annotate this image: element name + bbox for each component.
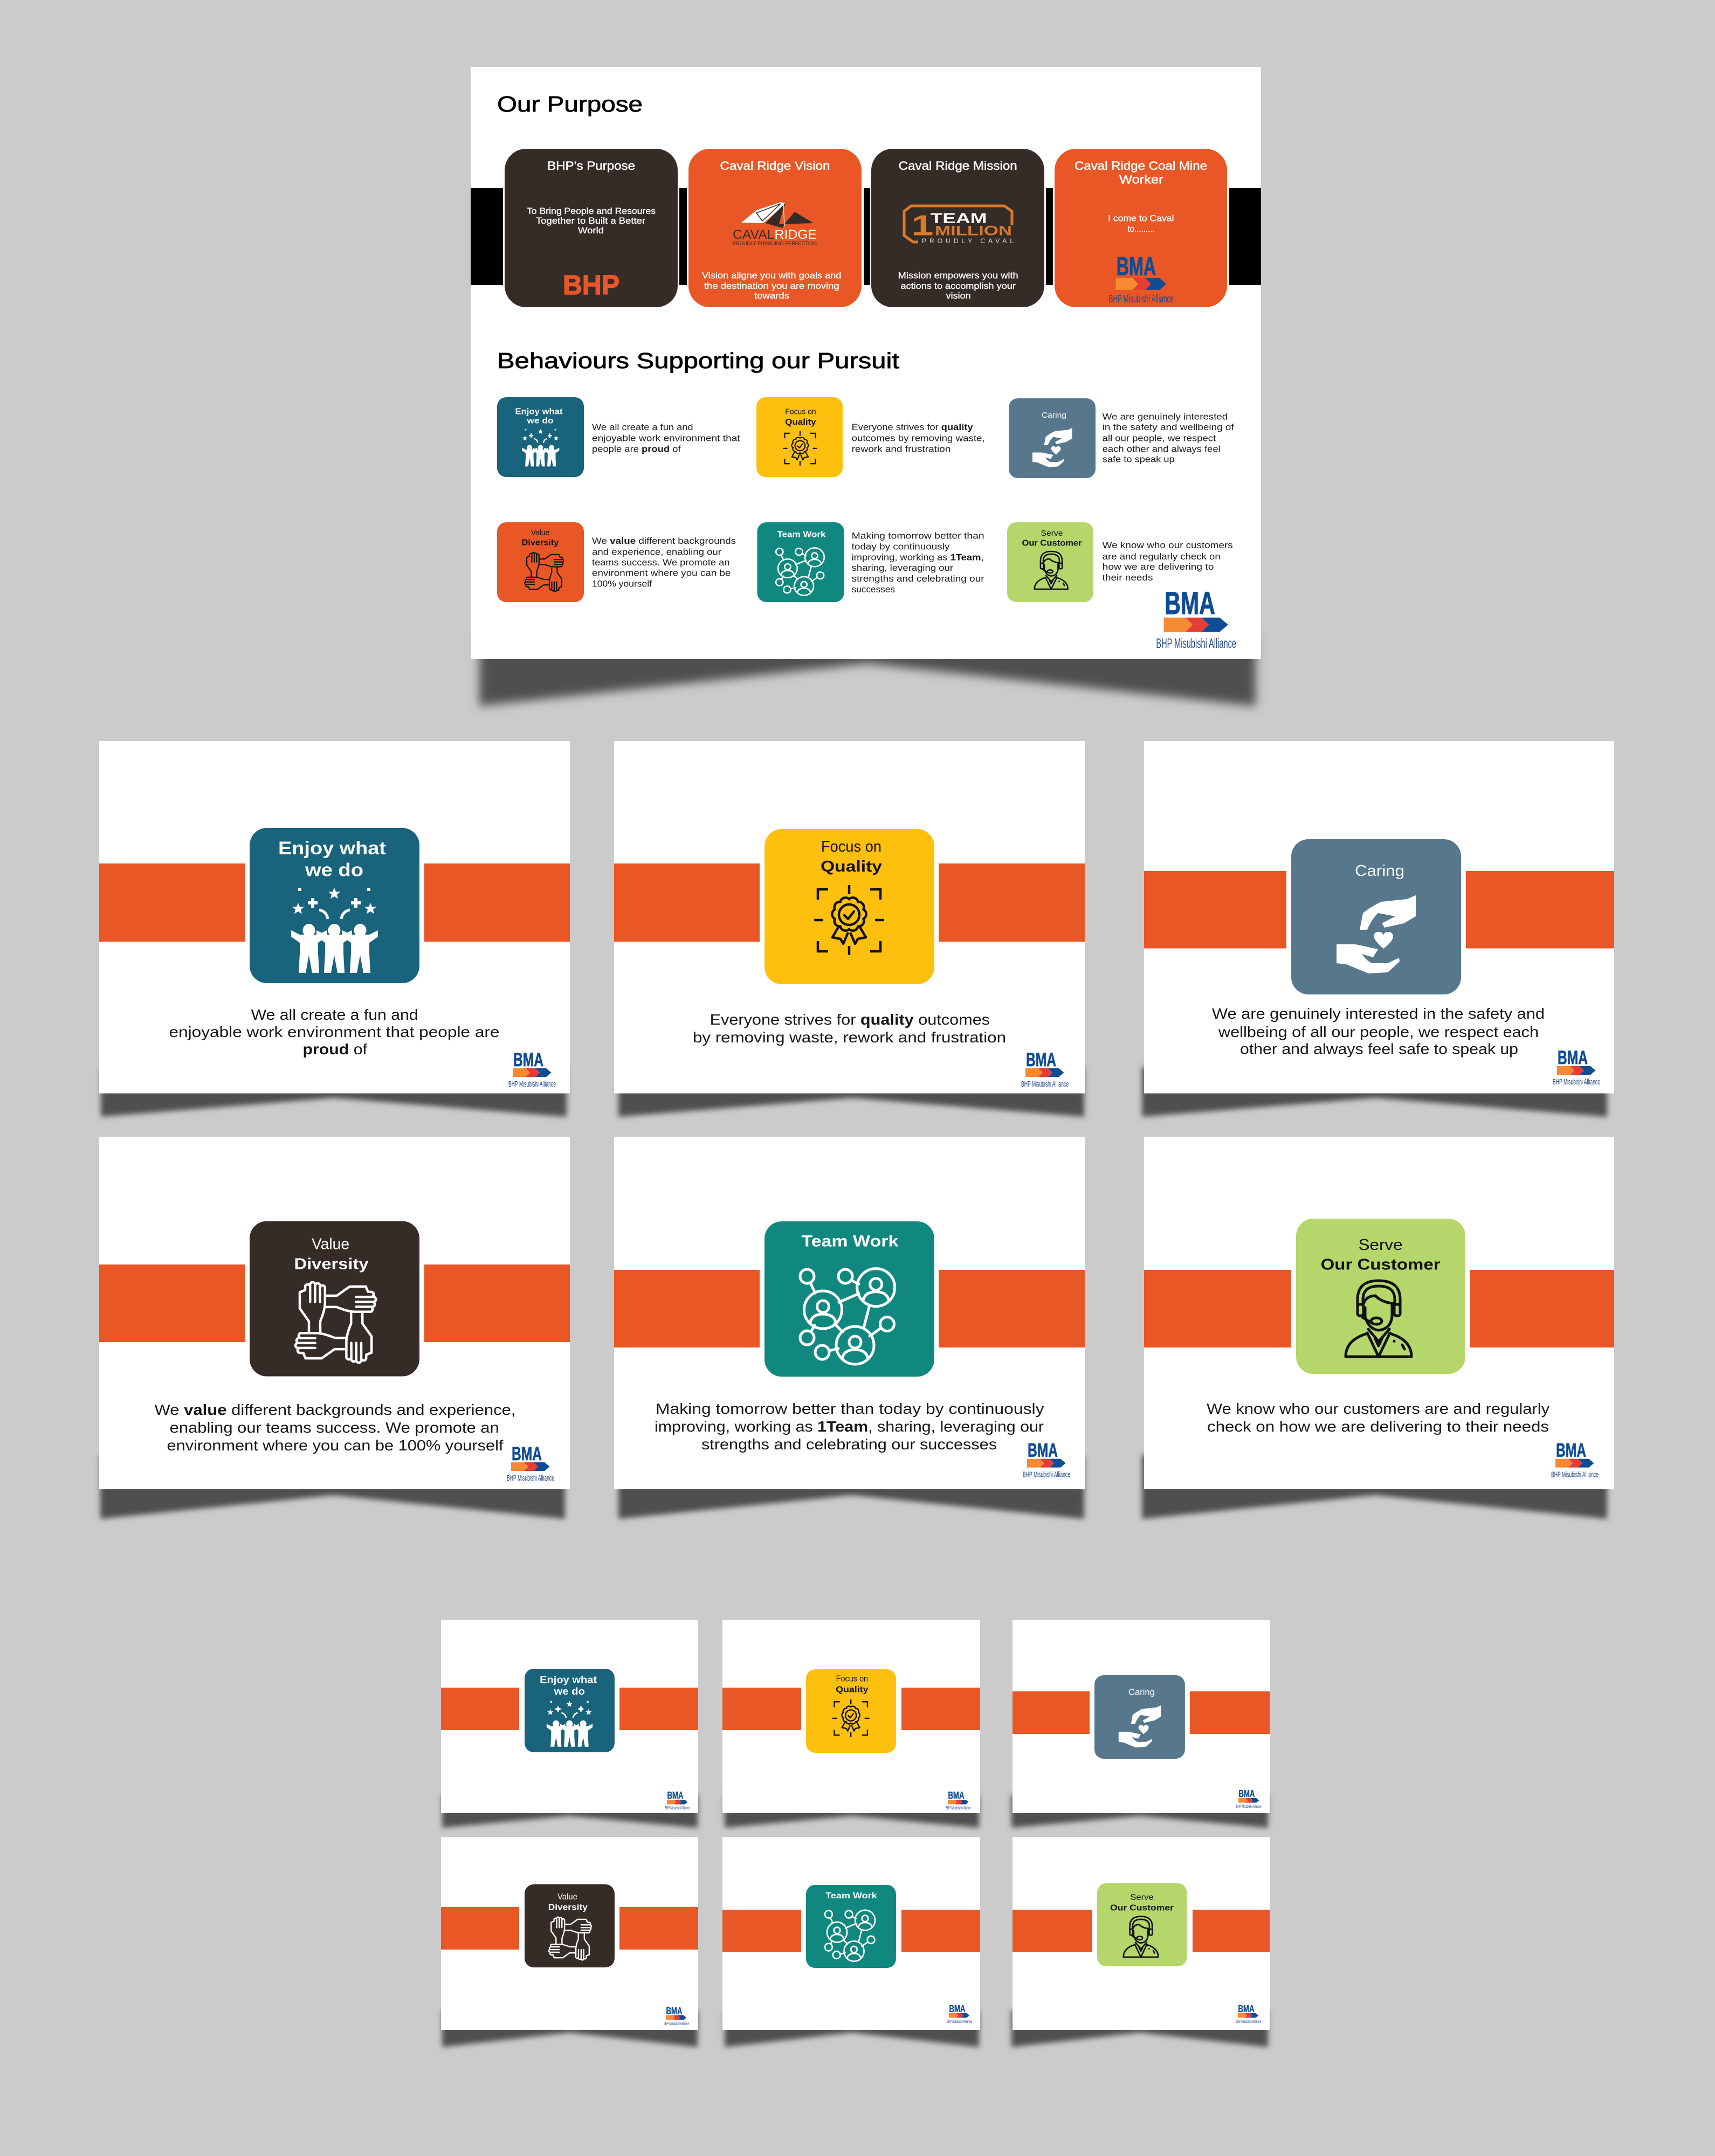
icon card: Quality <box>821 858 882 875</box>
logo: BMA: BHP Misubishi Alliance <box>1236 1804 1262 1809</box>
behaviour: enjoy what we do: we do <box>526 417 554 426</box>
description: We know who our customers are and regularly <box>1207 1400 1549 1417</box>
icon card: Enjoy what <box>278 838 386 859</box>
description: all our people, we respect <box>1103 433 1216 443</box>
description: are and regularly check on <box>1103 551 1221 562</box>
description: Making tomorrow better than today by continuously <box>656 1400 1044 1417</box>
logo: BMA: BMA <box>1556 1440 1586 1461</box>
logo: BMA <box>1021 1049 1069 1089</box>
small slide: customer <box>1011 1837 1270 2047</box>
icon card <box>1296 1219 1465 1374</box>
description: outcomes by removing waste, <box>852 433 985 443</box>
behaviour: serve our customer: Serve <box>1041 529 1063 538</box>
logo: BMA: BMA <box>513 1049 543 1070</box>
logo: BMA: BHP Misubishi Alliance <box>1156 636 1236 651</box>
icon card: Caring <box>1128 1688 1155 1697</box>
description: improving, working as 1Team , sharing, leveraging our <box>655 1418 1044 1435</box>
logo: 1 team 1 million: MILLION <box>935 224 1012 239</box>
slide: focus on quality <box>614 741 1085 1117</box>
card: caval ridge mission: Caval Ridge Mission <box>899 159 1017 172</box>
card: caval ridge mission: actions to accomplish your <box>900 281 1016 291</box>
logo: BMA <box>664 2005 689 2026</box>
logo: BMA: BHP Misubishi Alliance <box>1023 1470 1070 1480</box>
logo: BMA: BMA <box>1165 586 1215 621</box>
icon card <box>1094 1675 1185 1759</box>
description: We value different backgrounds and experience, <box>154 1401 515 1418</box>
icon card: Caring <box>1355 862 1404 880</box>
description: strengths and celebrating our successes <box>701 1436 997 1453</box>
small slide: enjoy <box>441 1620 698 1828</box>
behaviour: team work <box>757 522 984 602</box>
panel: our purpose poster <box>471 67 1261 706</box>
icon card: Serve <box>1130 1893 1154 1902</box>
small slide: team work <box>722 1837 980 2047</box>
icon card: Value <box>312 1235 349 1253</box>
heading: our purpose: Our Purpose <box>497 92 643 116</box>
behaviour: enjoy what we do: Enjoy what <box>515 407 563 417</box>
logo: BMA: BMA <box>1238 2003 1255 2014</box>
icon card: Diversity <box>294 1256 369 1273</box>
description: 100% yourself <box>592 578 652 589</box>
logo: BMA <box>1023 1440 1070 1480</box>
logo: caval ridge: CAVALRIDGE <box>733 227 817 242</box>
card: caval ridge vision: the destination you are moving <box>704 281 839 291</box>
logo: BMA: BHP Misubishi Alliance <box>1108 293 1174 305</box>
logo: BMA <box>508 1049 556 1089</box>
icon card: Focus on <box>821 838 881 855</box>
description: We all create a fun and <box>251 1006 418 1023</box>
behaviour: value diversity <box>497 522 736 602</box>
description: in the safety and wellbeing of <box>1103 422 1234 432</box>
logo: BMA <box>1236 2003 1261 2024</box>
description: improving, working as 1Team , <box>852 552 984 563</box>
logo: BMA: BMA <box>1026 1049 1056 1070</box>
description: sharing, leveraging our <box>852 563 953 573</box>
description: Everyone strives for quality outcomes <box>710 1011 990 1028</box>
logo: BMA: BMA <box>667 1789 684 1801</box>
card: caval ridge vision <box>688 149 862 307</box>
card: caval ridge vision: Caval Ridge Vision <box>720 159 830 172</box>
description: other and always feel safe to speak up <box>1240 1040 1518 1058</box>
description: rework and frustration <box>852 444 951 454</box>
icon card: Our Customer <box>1321 1256 1441 1273</box>
logo: BMA: BMA <box>1117 252 1156 281</box>
description: their needs <box>1103 572 1153 583</box>
logo: BMA: BHP Misubishi Alliance <box>664 2021 689 2026</box>
icon card <box>1097 1883 1187 1966</box>
logo: BMA: BHP Misubishi Alliance <box>1551 1470 1599 1480</box>
description <box>592 536 736 589</box>
logo: 1 team 1 million: TEAM <box>931 210 987 226</box>
card: BHP's purpose: World <box>578 225 604 236</box>
description: how we are delivering to <box>1103 562 1214 572</box>
description: and experience, enabling our <box>592 547 721 557</box>
description <box>852 422 985 454</box>
description: people are proud of <box>592 444 681 454</box>
logo: BMA: BMA <box>512 1443 542 1464</box>
logo: BMA: BMA <box>949 2003 966 2014</box>
card: coal mine worker: to......... <box>1128 224 1155 234</box>
icon card: Focus on <box>836 1674 868 1684</box>
icon card <box>806 1885 896 1968</box>
logo: BMA <box>947 2003 972 2024</box>
description: We all create a fun and <box>592 422 693 432</box>
icon card <box>525 1669 615 1752</box>
behaviour: serve our customer: Our Customer <box>1022 539 1082 548</box>
description: We are genuinely interested <box>1103 411 1228 421</box>
slide: team work <box>614 1137 1085 1519</box>
logo: BMA <box>1156 586 1236 651</box>
icon card: Quality <box>836 1685 869 1695</box>
logo: BMA <box>1108 252 1174 305</box>
description <box>169 1006 499 1058</box>
card: coal mine worker: Caval Ridge Coal Mine <box>1075 159 1207 172</box>
behaviour: value diversity: Value <box>531 528 549 537</box>
logo: BMA <box>1551 1440 1599 1480</box>
icon card <box>525 1884 615 1967</box>
card: caval ridge mission: vision <box>946 291 971 301</box>
description: each other and always feel <box>1103 444 1221 454</box>
logo: BMA: BHP Misubishi Alliance <box>946 1806 971 1811</box>
icon card: we do <box>553 1686 585 1697</box>
logo: 1 team 1 million <box>904 206 1014 245</box>
card: BHP's purpose: BHP <box>563 270 619 300</box>
description <box>1103 411 1234 464</box>
logo: caval ridge <box>733 202 817 247</box>
card: caval ridge mission <box>871 149 1044 307</box>
description: enjoyable work environment that <box>592 433 740 443</box>
behaviour: team work: Team Work <box>777 530 826 539</box>
card: BHP's purpose: Together to Built a Better <box>536 216 645 226</box>
description: by removing waste, rework and frustration <box>693 1029 1006 1046</box>
small slide: diversity <box>441 1837 698 2047</box>
description: enabling our teams success. We promote an <box>170 1419 499 1436</box>
description <box>154 1401 515 1454</box>
description <box>655 1400 1044 1453</box>
icon card: we do <box>305 860 363 881</box>
behaviour: serve our customer <box>1007 522 1233 602</box>
card: coal mine worker <box>1055 149 1227 307</box>
logo: BMA: BHP Misubishi Alliance <box>1021 1080 1069 1089</box>
small slide: caring <box>1011 1620 1270 1828</box>
behaviour: caring <box>1009 398 1234 478</box>
logo: BMA: BHP Misubishi Alliance <box>665 1806 690 1811</box>
description: We know who our customers <box>1103 540 1233 550</box>
behaviour: focus on quality <box>756 397 985 477</box>
icon card: Our Customer <box>1110 1903 1174 1913</box>
card: BHP's purpose: To Bring People and Resoures <box>527 206 656 216</box>
logo: BMA: BHP Misubishi Alliance <box>507 1474 554 1483</box>
card: caval ridge vision: towards <box>754 291 789 301</box>
icon card <box>250 828 419 983</box>
card: caval ridge mission: Mission empowers you with <box>898 271 1018 281</box>
logo: BMA: BMA <box>948 1789 965 1801</box>
icon card <box>764 1221 934 1377</box>
icon card: Team Work <box>801 1232 899 1250</box>
behaviour: value diversity: Diversity <box>522 538 559 548</box>
description: Everyone strives for quality <box>852 422 973 432</box>
card: BHP's purpose: BHP’s Purpose <box>547 159 635 172</box>
description <box>1103 540 1233 583</box>
icon card <box>250 1221 419 1377</box>
logo: 1 team 1 million: PROUDLY CAVAL <box>922 237 1014 245</box>
logo: BMA: BMA <box>666 2005 683 2016</box>
logo: BMA <box>1236 1788 1262 1809</box>
description: wellbeing of all our people, we respect each <box>1218 1024 1539 1040</box>
card: coal mine worker: Worker <box>1119 173 1163 186</box>
description: enjoyable work environment that people are <box>169 1024 499 1040</box>
description <box>852 531 984 595</box>
behaviour: focus on quality: Quality <box>785 418 816 427</box>
icon card: Diversity <box>548 1903 588 1912</box>
heading: behaviours: Behaviours Supporting our Pursuit <box>497 348 900 373</box>
logo: BMA: BMA <box>1558 1047 1588 1068</box>
logo: BMA <box>946 1789 971 1811</box>
description: proud of <box>303 1041 367 1058</box>
icon card <box>806 1669 896 1753</box>
logo: BMA: BHP Misubishi Alliance <box>508 1080 556 1089</box>
description: today by continuously <box>852 541 950 551</box>
card: coal mine worker: I come to Caval <box>1108 213 1174 224</box>
logo: BMA <box>665 1789 690 1811</box>
slide: value diversity <box>99 1137 570 1519</box>
description: check on how we are delivering to their needs <box>1207 1418 1549 1435</box>
icon card: Serve <box>1359 1236 1403 1254</box>
description: We value different backgrounds <box>592 536 736 546</box>
slide: enjoy what we do <box>99 741 570 1117</box>
logo: BMA: BMA <box>1239 1788 1255 1799</box>
logo: BMA: BHP Misubishi Alliance <box>1236 2019 1261 2024</box>
description: successes <box>852 584 895 595</box>
description: We are genuinely interested in the safety and <box>1212 1005 1545 1022</box>
behaviour: focus on quality: Focus on <box>785 407 816 417</box>
logo: BMA <box>1553 1047 1600 1087</box>
small slide: quality <box>722 1620 980 1828</box>
slide: caring <box>1142 741 1614 1117</box>
description: environment where you can be <box>592 568 731 578</box>
description: safe to speak up <box>1103 454 1175 464</box>
behaviour: caring: Caring <box>1042 411 1066 420</box>
behaviour: enjoy what we do <box>497 397 740 477</box>
slide: serve our customer <box>1142 1137 1614 1519</box>
logo: caval ridge: PROUDLY PURSUING PERFECTION <box>733 241 817 247</box>
icon card <box>764 829 934 984</box>
logo: BMA <box>507 1443 554 1483</box>
description: Making tomorrow better than <box>852 531 984 541</box>
description: environment where you can be 100% yourself <box>167 1437 504 1454</box>
description <box>693 1011 1006 1046</box>
description: teams success. We promote an <box>592 557 730 568</box>
icon card: Enjoy what <box>540 1674 597 1685</box>
card: BHP's purpose <box>505 149 678 307</box>
description <box>592 422 740 454</box>
logo: 1 team 1 million: 1 <box>911 210 934 242</box>
icon card: Team Work <box>825 1891 877 1901</box>
logo: BMA: BMA <box>1028 1440 1058 1461</box>
logo: BMA: BHP Misubishi Alliance <box>947 2019 972 2024</box>
description <box>1207 1400 1549 1435</box>
logo: BMA: BHP Misubishi Alliance <box>1553 1077 1600 1087</box>
card: caval ridge vision: Vision aligne you with goals and <box>702 271 841 281</box>
icon card: Value <box>557 1892 577 1902</box>
icon card <box>1291 839 1461 994</box>
black band <box>471 188 1261 285</box>
description: strengths and celebrating our <box>852 573 984 584</box>
description <box>1212 1005 1545 1058</box>
